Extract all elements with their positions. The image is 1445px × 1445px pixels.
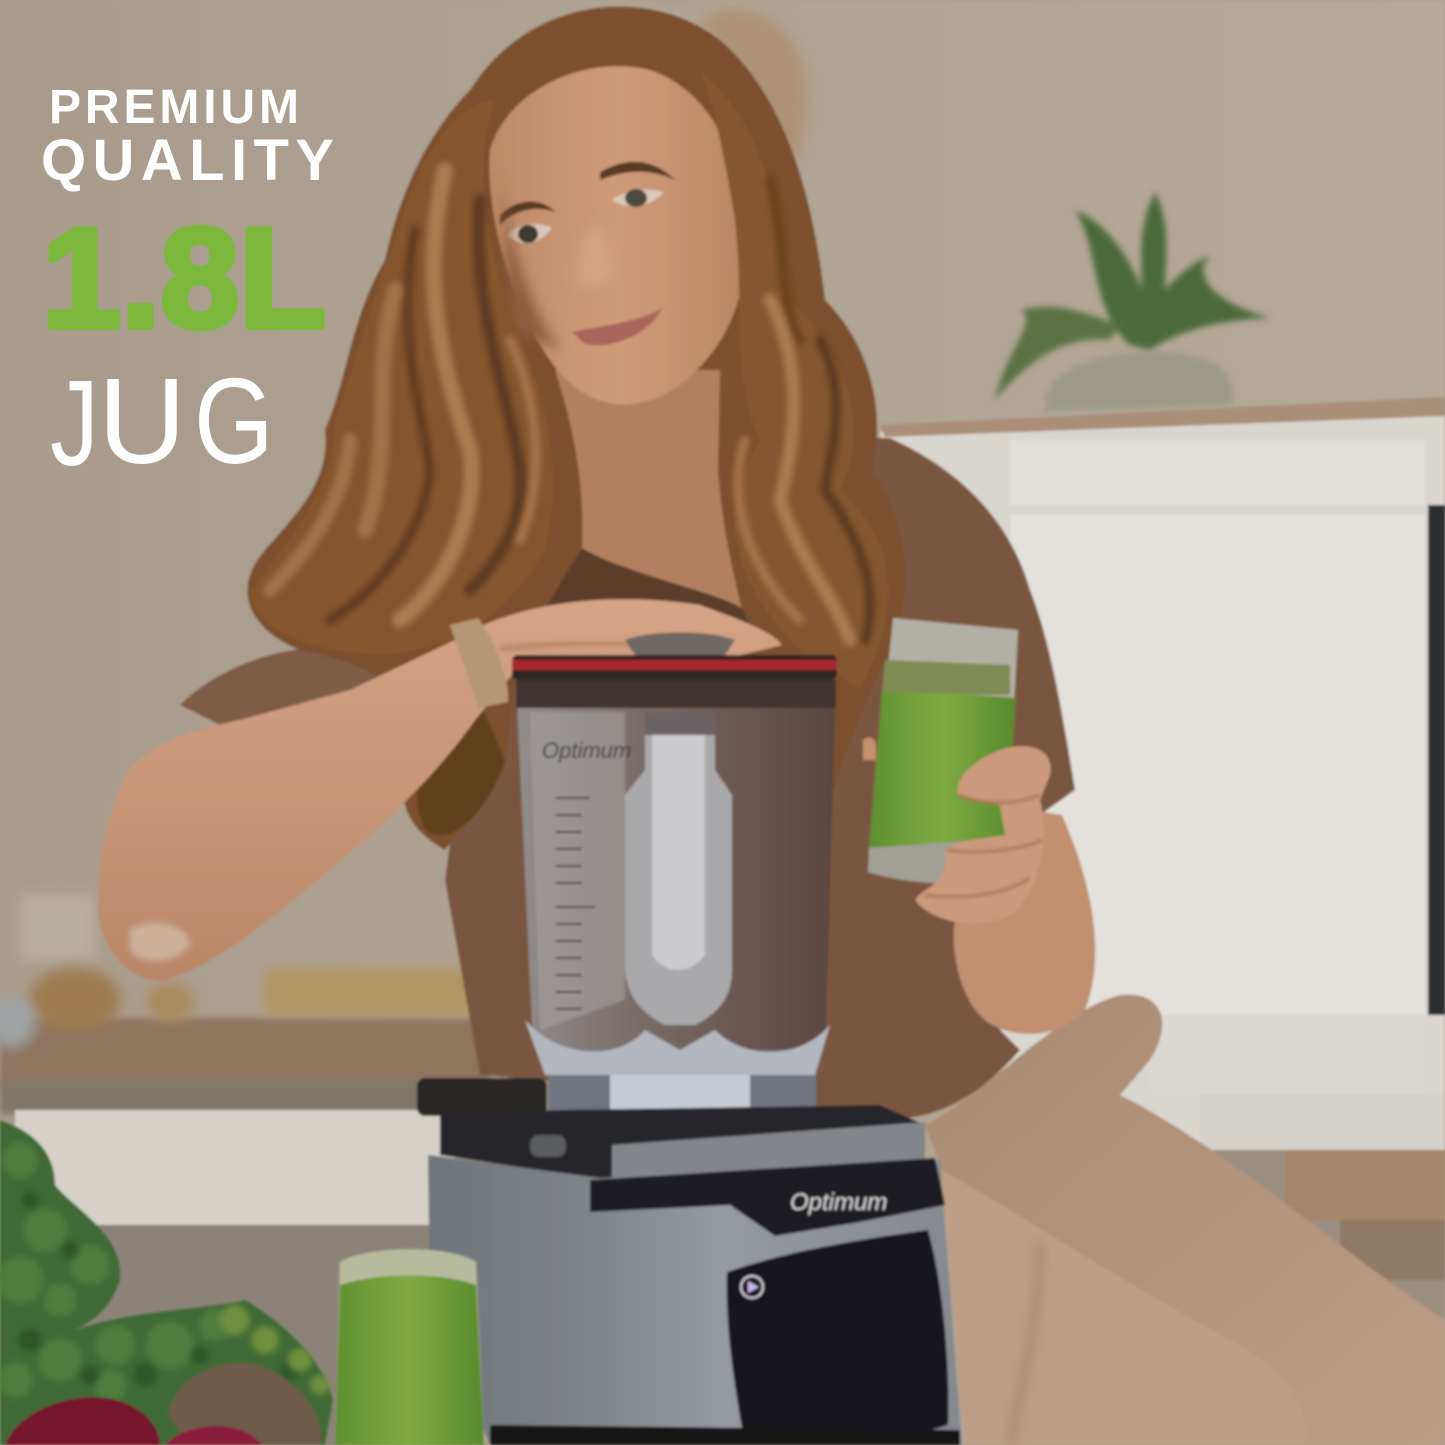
control panel	[727, 1230, 948, 1445]
blender base	[428, 1105, 962, 1445]
capacity figure: 1.8L	[42, 199, 326, 358]
smartphone on blender	[417, 1078, 547, 1116]
blender jug: base feet	[525, 1020, 830, 1128]
quality: QUALITY	[41, 128, 334, 193]
blender jug: lid	[512, 632, 837, 680]
start stop button	[741, 1276, 763, 1298]
jug measuring scale	[556, 798, 595, 1009]
kale and beets	[0, 1120, 333, 1445]
scrunchie	[450, 618, 508, 708]
woman: right arm holding glass	[954, 810, 1095, 1034]
background: wall decoration behind head	[700, 8, 808, 165]
background: right counter	[1140, 1150, 1445, 1445]
front glass of green smoothie	[335, 1249, 484, 1445]
woman: hair front strands	[250, 70, 888, 835]
brown beetroot	[168, 1363, 321, 1445]
woman: neck and chest	[555, 370, 742, 610]
background: potted plant on shelf	[995, 192, 1270, 412]
jug brand logo: Optimum	[542, 738, 631, 763]
letter J: J	[50, 356, 99, 492]
woman: brown t-shirt body	[445, 430, 1075, 1118]
woman: shirt collar	[520, 548, 760, 650]
background: left countertop with food	[0, 895, 490, 1445]
kale leaf texture	[0, 1142, 231, 1401]
woman: face	[489, 66, 768, 404]
held glass of green smoothie	[868, 618, 1018, 884]
woman: left arm resting on jug	[98, 599, 782, 980]
blender jug: clear container	[516, 680, 836, 1062]
woman: hair back	[247, 6, 905, 850]
premium: PREMIUM	[49, 81, 299, 134]
heading: premium quality	[41, 81, 334, 193]
letter U: U	[98, 353, 186, 489]
background: white kitchen cabinets	[880, 397, 1445, 1150]
red beet	[5, 1397, 160, 1445]
blender jug: central column	[625, 712, 732, 1025]
jug label	[50, 353, 274, 492]
woman: brown t-shirt sleeve	[180, 647, 470, 734]
hand holding glass	[863, 738, 1051, 924]
woman: beige trousers	[925, 994, 1445, 1445]
base brand logo: Optimum	[790, 1189, 887, 1216]
letter G: G	[194, 353, 274, 489]
